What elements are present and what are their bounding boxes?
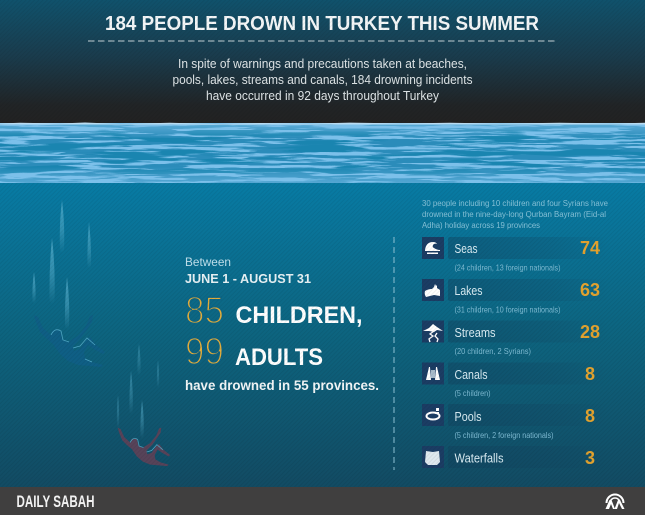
holiday note <box>422 198 608 230</box>
title: 184 PEOPLE DROWN IN TURKEY THIS SUMMER <box>105 13 540 35</box>
icon: agency logo <box>606 494 624 509</box>
main statement: JUNE 1 - AUGUST 31 <box>185 271 311 286</box>
adults count: 99 <box>185 331 224 373</box>
icon: waterfall <box>425 451 440 465</box>
row: lakes <box>422 279 608 314</box>
footer bar <box>0 487 645 515</box>
rising bubbles above second figure <box>117 344 159 438</box>
row: streams: Streams <box>454 325 496 340</box>
row: seas: 74 <box>580 238 600 258</box>
main statement: Between <box>185 255 231 269</box>
row: canals: Canals <box>454 367 488 382</box>
holiday note: 30 people including 10 children and four Syrians have <box>422 198 608 208</box>
intro text: pools, lakes, streams and canals, 184 drowning incidents <box>172 73 472 87</box>
icon: lake <box>425 284 440 297</box>
background: underwater <box>0 182 645 488</box>
row: waterfalls: Waterfalls <box>454 450 504 466</box>
row: pools: Pools <box>454 409 482 424</box>
intro text <box>172 57 472 103</box>
icon: pool <box>426 412 440 420</box>
icon: wave <box>425 242 440 254</box>
icon: canal <box>426 367 440 380</box>
row: waterfalls: 3 <box>585 448 595 468</box>
row: lakes: 63 <box>580 280 600 300</box>
row: pools: 8 <box>585 406 595 426</box>
row: seas: Seas <box>454 241 478 256</box>
children count: 85 <box>185 290 224 332</box>
row: pools: (5 children, 2 foreign nationals) <box>454 430 554 440</box>
main statement: ADULTS <box>235 344 323 371</box>
row: seas <box>422 237 608 272</box>
icon: stream <box>423 324 443 332</box>
rising bubbles above first figure <box>32 200 91 330</box>
row: canals: (5 children) <box>454 388 491 398</box>
main statement: CHILDREN, <box>236 302 362 329</box>
intro text: have occurred in 92 days throughout Turkey <box>206 89 440 103</box>
row: pools <box>422 404 608 440</box>
texture overlay <box>0 0 645 122</box>
row: canals <box>422 362 608 398</box>
texture overlay underwater <box>0 183 645 487</box>
intro text: In spite of warnings and precautions taken at beaches, <box>178 57 467 71</box>
row: streams <box>422 320 608 356</box>
water surface band <box>0 122 645 183</box>
row: streams: (20 children, 2 Syrians) <box>454 346 531 356</box>
holiday note: Adha) holiday across 19 provinces <box>422 220 541 230</box>
main statement: have drowned in 55 provinces. <box>185 377 379 393</box>
row: waterfalls <box>422 446 608 468</box>
row: lakes: (31 children, 10 foreign nationals) <box>454 304 561 314</box>
footer brand: DAILY SABAH <box>16 493 94 511</box>
figure: sinking person, large <box>34 315 105 367</box>
figure: sinking person, small <box>118 428 170 466</box>
row: lakes: Lakes <box>454 283 483 298</box>
background: dusk sky <box>0 0 645 124</box>
row: seas: (24 children, 13 foreign nationals) <box>454 262 561 272</box>
row: streams: 28 <box>580 322 600 342</box>
main statement <box>185 255 379 393</box>
holiday note: drowned in the nine-day-long Qurban Bayram (Eid-al <box>422 209 606 219</box>
row: canals: 8 <box>585 364 595 384</box>
